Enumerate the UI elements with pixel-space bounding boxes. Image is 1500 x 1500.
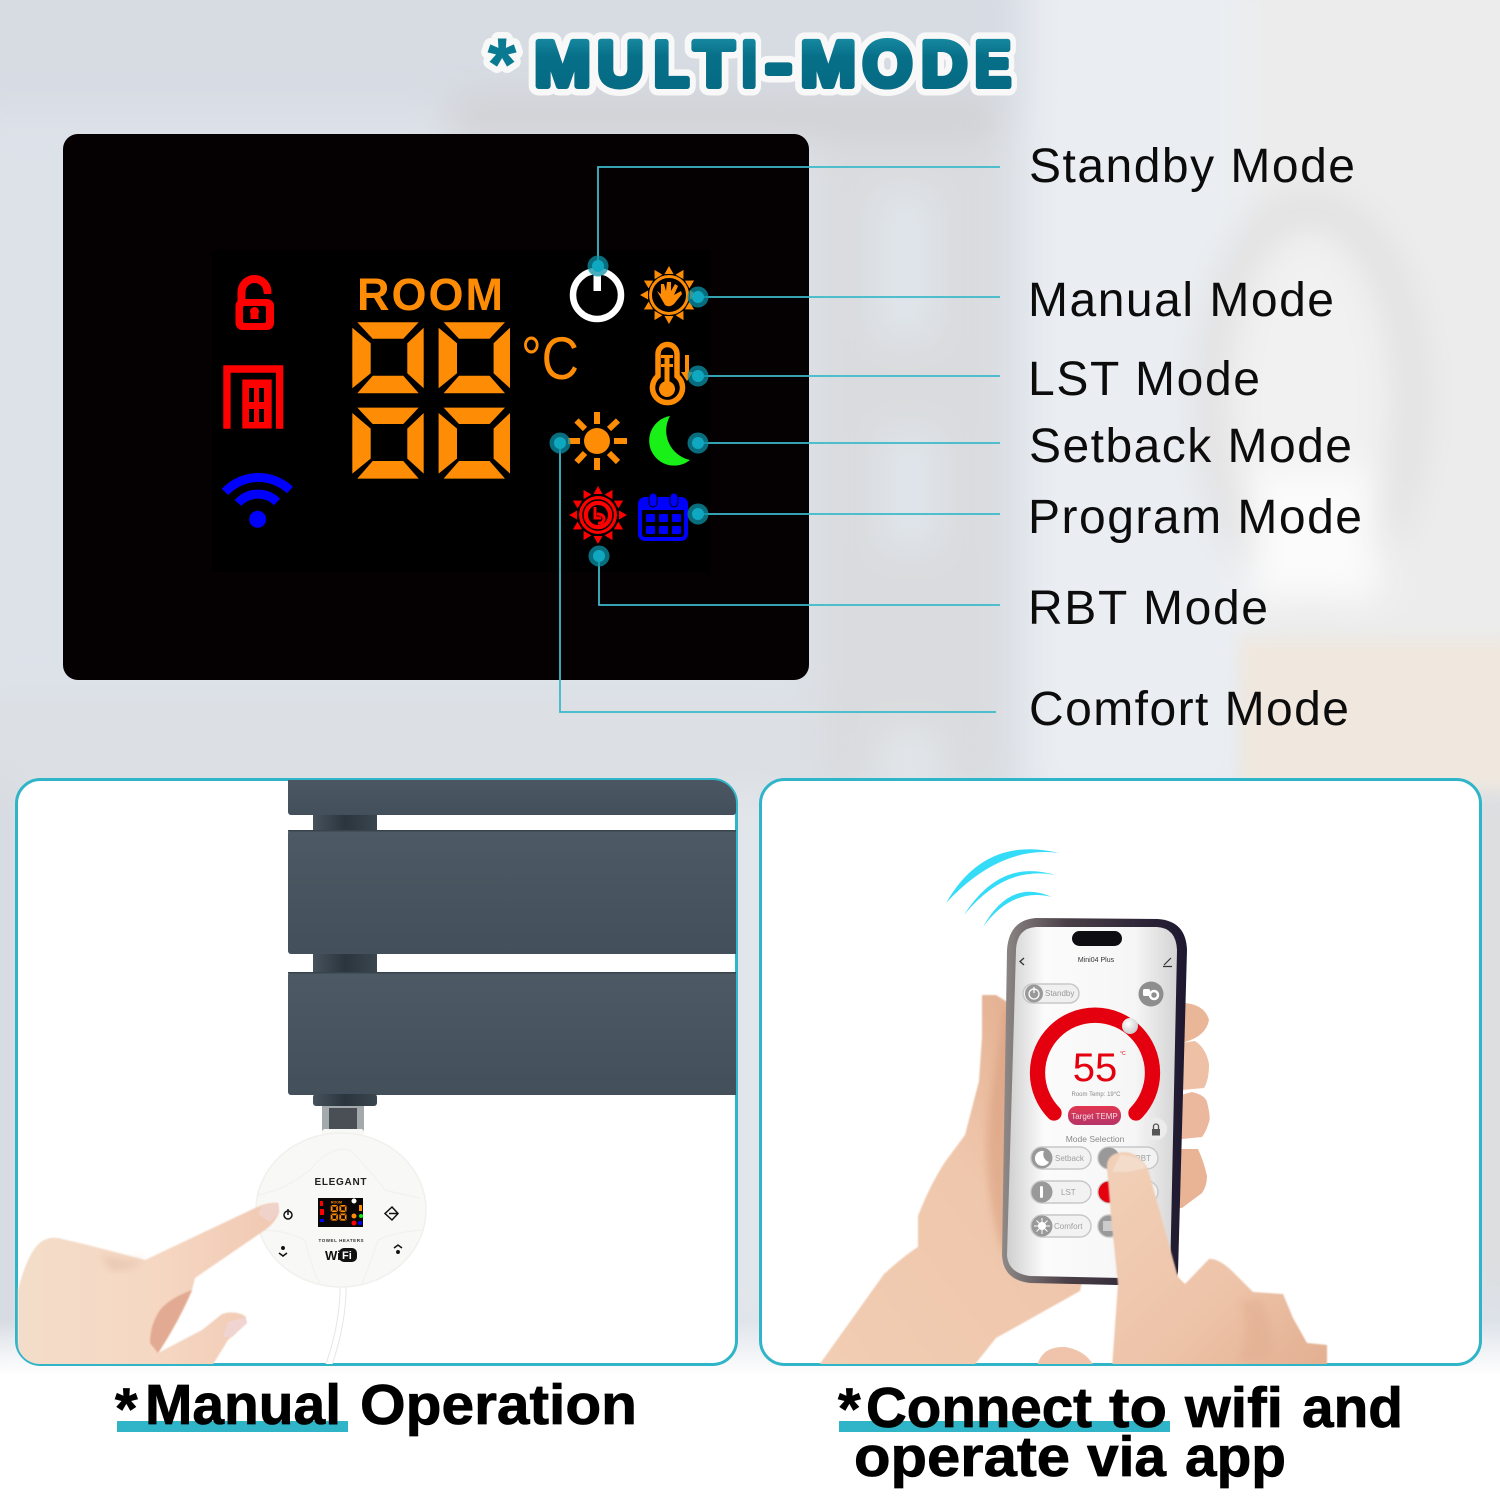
icon: unlocked padlock — [236, 279, 274, 330]
mode labels: Comfort Mode — [1029, 683, 1349, 736]
title: I — [742, 28, 757, 100]
title: * — [488, 25, 516, 105]
icon: power standby — [573, 262, 621, 319]
mode labels: LST Mode — [1028, 353, 1260, 406]
mode selection: Mode Selection — [1066, 1134, 1125, 1144]
mode labels: Standby Mode — [1029, 140, 1355, 193]
room label: ROOM — [357, 269, 503, 320]
title: M — [800, 28, 856, 100]
title: U — [597, 28, 644, 100]
temperature dial: Room Temp: 19°C — [1072, 1092, 1121, 1098]
hand pressing button — [18, 1203, 279, 1366]
title: D — [921, 28, 967, 100]
icon: program calendar — [640, 493, 686, 539]
heater controller — [256, 1129, 426, 1287]
title: - — [766, 29, 792, 100]
callout lines — [560, 167, 1000, 712]
title: E — [975, 28, 1011, 100]
title: L — [654, 28, 689, 100]
towel rail — [288, 770, 748, 1106]
pointing hand — [1107, 1152, 1327, 1368]
caption: connect to wifi: app — [1185, 1425, 1286, 1489]
title: M — [534, 28, 591, 100]
icon: wifi — [225, 478, 290, 528]
lock button — [1152, 1118, 1167, 1140]
icon: wifi signal arcs — [946, 849, 1059, 927]
wifi badge: Fi — [342, 1250, 352, 1262]
degree celsius: °C — [521, 325, 579, 392]
mode pills: Comfort — [1054, 1222, 1083, 1231]
title: E — [975, 28, 1011, 100]
icon: comfort sun — [568, 412, 627, 470]
icon: thermometer LST — [652, 344, 693, 403]
temperature dial — [1038, 1015, 1152, 1113]
panel: app operation — [115, 780, 1480, 1489]
seven-segment digits — [352, 322, 510, 479]
caption: connect to wifi: Connect — [866, 1376, 1092, 1440]
mode pills: RBT — [1135, 1154, 1151, 1163]
holding hand — [817, 995, 1210, 1368]
title: U — [597, 28, 644, 100]
title: * — [488, 25, 516, 105]
title: T — [694, 28, 734, 100]
mode labels — [1028, 140, 1362, 736]
caption: manual operation — [115, 1373, 637, 1442]
temperature dial: 55 — [1073, 1046, 1117, 1090]
caption: connect to wifi — [838, 1376, 1403, 1489]
icon: setback moon — [649, 416, 690, 466]
wifi badge — [325, 1248, 357, 1263]
caption: connect to wifi: to — [1109, 1376, 1167, 1440]
title: L — [654, 28, 689, 100]
wifi badge: Wi — [325, 1248, 341, 1263]
mini display: ROOM — [331, 1200, 342, 1204]
icon: room door — [223, 365, 283, 429]
caption: manual operation: * — [115, 1377, 138, 1442]
heater controller: TOWEL HEATERS — [318, 1238, 364, 1243]
title: I — [742, 28, 757, 100]
target temp pill — [1068, 1106, 1121, 1125]
notch — [1072, 931, 1122, 946]
caption: connect to wifi: and — [1302, 1376, 1403, 1440]
phone header — [1020, 957, 1172, 966]
mode pills — [1031, 1147, 1158, 1237]
mode labels: Manual Mode — [1028, 274, 1334, 327]
title: T — [694, 28, 734, 100]
mode labels: Setback Mode — [1029, 420, 1352, 473]
caption: connect to wifi: via — [1087, 1425, 1167, 1489]
connector — [322, 1106, 364, 1132]
title: - — [766, 29, 792, 100]
standby pill: Standby — [1045, 989, 1074, 998]
phone — [1002, 918, 1327, 1368]
caption: manual operation: Manual — [145, 1373, 341, 1437]
title: M — [800, 28, 856, 100]
button icons — [279, 1207, 402, 1256]
panel: manual operation — [16, 770, 748, 1370]
title: M — [534, 28, 591, 100]
mode labels: Program Mode — [1028, 491, 1362, 544]
temperature dial: °C — [1120, 1051, 1126, 1057]
title: D — [921, 28, 967, 100]
title — [488, 25, 1011, 105]
heater controller: ELEGANT — [314, 1177, 366, 1188]
caption: connect to wifi: wifi — [1184, 1376, 1283, 1440]
caption: connect to wifi: * — [838, 1377, 861, 1442]
icon: RBT red sun — [569, 486, 627, 544]
mode pills: LST — [1061, 1188, 1076, 1197]
standby pill — [1023, 984, 1079, 1003]
caption: connect to wifi: operate — [854, 1425, 1070, 1489]
caption: manual operation: Operation — [360, 1373, 637, 1437]
target temp pill: Target TEMP — [1071, 1112, 1118, 1121]
title: O — [863, 28, 912, 100]
panel: control display — [63, 134, 809, 680]
mode labels: RBT Mode — [1028, 582, 1268, 635]
settings button — [1138, 982, 1164, 1006]
title: O — [863, 28, 912, 100]
callout dots — [550, 256, 708, 566]
icon: manual sun with hand — [640, 266, 698, 324]
phone header: Mini04 Plus — [1078, 957, 1115, 964]
mode pills: Setback — [1055, 1154, 1085, 1163]
cable — [327, 1280, 343, 1370]
mini display — [318, 1198, 363, 1227]
